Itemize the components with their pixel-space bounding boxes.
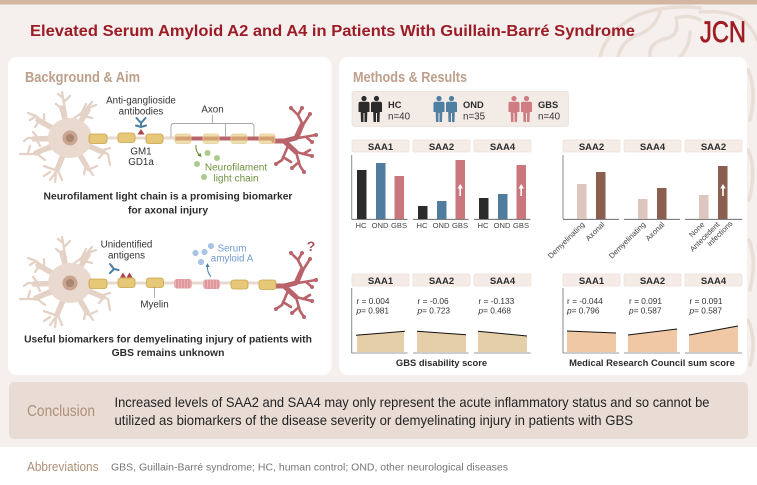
bar chart: subtype and infection: None xyxy=(687,220,706,239)
heading: background and aim: Background & Aim xyxy=(25,69,140,86)
bar chart: subtype and infection: infections xyxy=(705,219,735,248)
diagram: axonal injury neuron xyxy=(20,92,318,182)
label: axon: Axon xyxy=(201,104,224,116)
text: conclusion statement xyxy=(114,394,710,428)
correlation charts: GBS disability score: p= 0.981 xyxy=(356,306,389,316)
correlation charts: GBS disability score: SAA1 xyxy=(368,276,394,287)
bar chart: SAA by group: SAA1 xyxy=(368,142,394,153)
bar chart: SAA by group: OND xyxy=(372,221,389,230)
label: unidentified antigens: antigens xyxy=(108,250,145,262)
label: unidentified antigens: Unidentified xyxy=(101,240,152,250)
legend item: GBS: GBS xyxy=(538,100,558,110)
text: conclusion statement: utilized as biomarkers of the disease severity or demyelinating injury in patients with GBS xyxy=(114,412,633,428)
label: myelin xyxy=(140,287,169,310)
legend item: HC: HC xyxy=(388,100,402,110)
correlation charts: Medical Research Council sum score: r = 0.091 xyxy=(629,296,662,306)
bar chart: SAA by group: OND xyxy=(433,221,450,230)
bar chart: subtype and infection: Demyelinating xyxy=(607,220,647,260)
heading: methods and results: Methods & Results xyxy=(353,69,467,86)
text: unknown biomarkers statement: GBS remains unknown xyxy=(112,348,224,359)
correlation charts: Medical Research Council sum score: SAA1 xyxy=(579,276,605,287)
correlation charts: Medical Research Council sum score: p= 0.796 xyxy=(566,306,600,316)
bar chart: subtype and infection: Axonal xyxy=(584,220,607,243)
panel: conclusion xyxy=(9,382,748,439)
legend: groups xyxy=(352,92,568,126)
correlation charts: GBS disability score: p= 0.468 xyxy=(478,306,511,316)
text: unknown biomarkers statement: Useful biomarkers for demyelinating injury of patients with xyxy=(24,334,312,346)
correlation charts: GBS disability score xyxy=(352,274,531,368)
correlation charts: GBS disability score: r = -0.06 xyxy=(418,296,449,306)
diagram: demyelinating injury neuron xyxy=(20,237,318,327)
bar chart: subtype and infection: SAA4 xyxy=(640,142,666,153)
correlation charts: GBS disability score: p= 0.723 xyxy=(416,306,450,316)
label: myelin: Myelin xyxy=(140,300,169,310)
bar chart: SAA by group: SAA2 xyxy=(429,142,454,153)
correlation charts: GBS disability score: r = -0.133 xyxy=(478,296,515,306)
label: neurofilament light chain: Neurofilament xyxy=(205,162,267,174)
text: NfL statement: for axonal injury xyxy=(128,206,208,216)
bar chart: SAA by group: HC xyxy=(417,221,428,230)
bar chart: subtype and infection: Axonal xyxy=(644,220,667,243)
label: neurofilament light chain: light chain xyxy=(213,174,259,184)
panel: methods and results xyxy=(339,57,747,375)
label: serum amyloid A: Serum xyxy=(218,244,246,254)
icon: antibody xyxy=(136,118,146,127)
bar chart: SAA by group: SAA4 xyxy=(490,142,516,153)
text: NfL statement: Neurofilament light chain is a promising biomarker xyxy=(44,192,292,202)
bar chart: subtype and infection: Demyelinating xyxy=(546,220,586,260)
bar chart: subtype and infection: SAA2 xyxy=(701,142,726,153)
heading: conclusion: Conclusion xyxy=(27,403,95,420)
icon: serum amyloid release xyxy=(193,243,214,277)
correlation charts: Medical Research Council sum score: p= 0.587 xyxy=(688,306,722,316)
label: anti-ganglioside antibodies: Anti-ganglioside xyxy=(106,96,176,106)
correlation charts: Medical Research Council sum score: SAA4 xyxy=(701,276,727,287)
bar chart: SAA by group: GBS xyxy=(452,221,468,230)
abbreviations text: GBS, Guillain-Barré syndrome; HC, human control; OND, other neurological diseases xyxy=(111,462,508,474)
correlation charts: Medical Research Council sum score: SAA2 xyxy=(640,276,665,287)
icon: question mark: ? xyxy=(307,238,315,254)
legend item: OND xyxy=(434,96,486,122)
caption: GBS disability score: GBS disability score xyxy=(396,357,487,368)
correlation charts: GBS disability score: SAA2 xyxy=(429,276,454,287)
bar chart: subtype and infection xyxy=(546,140,742,260)
title: Elevated Serum Amyloid A2 and A4 in Patients With Guillain-Barré Syndrome xyxy=(30,23,635,40)
bar chart: subtype and infection: Antecedent xyxy=(688,219,722,254)
label: GM1 GD1a: GM1 xyxy=(130,146,152,158)
legend item: OND: n=35 xyxy=(463,112,486,122)
correlation charts: Medical Research Council sum score: r = 0.091 xyxy=(690,296,723,306)
legend item: GBS: n=40 xyxy=(538,112,561,122)
icon: neurofilament release xyxy=(194,145,220,180)
icon: antibody xyxy=(110,264,118,273)
legend item: OND: OND xyxy=(463,100,484,110)
correlation charts: GBS disability score: r = 0.004 xyxy=(356,296,390,306)
bar chart: SAA by group: HC xyxy=(478,221,489,230)
panel: background and aim xyxy=(8,57,332,375)
legend item: GBS xyxy=(508,96,561,122)
abbreviations heading: Abbreviations xyxy=(27,460,98,474)
icon: antigen triangle xyxy=(138,129,144,134)
bar chart: SAA by group xyxy=(352,140,531,230)
legend item: HC xyxy=(358,96,411,122)
legend item: HC: n=40 xyxy=(388,112,411,122)
bar chart: SAA by group: GBS xyxy=(391,221,407,230)
bar chart: subtype and infection: SAA2 xyxy=(579,142,604,153)
text: conclusion statement: Increased levels of SAA2 and SAA4 may only represent the acute inflammatory status and so cannot be xyxy=(114,394,710,410)
caption: Medical Research Council sum score: Medical Research Council sum score xyxy=(569,357,735,368)
bar chart: SAA by group: HC xyxy=(356,221,367,230)
bracket: axon xyxy=(171,115,254,137)
bar chart: SAA by group: GBS xyxy=(513,221,529,230)
correlation charts: Medical Research Council sum score: r = -0.044 xyxy=(567,296,603,306)
correlation charts: Medical Research Council sum score xyxy=(563,274,742,368)
correlation charts: Medical Research Council sum score: p= 0.587 xyxy=(628,306,662,316)
brain watermark xyxy=(600,7,757,365)
label: anti-ganglioside antibodies: antibodies xyxy=(119,106,163,118)
journal logo: JCN xyxy=(700,16,746,49)
bar chart: SAA by group: OND xyxy=(494,221,511,230)
label: GM1 GD1a: GD1a xyxy=(128,157,154,168)
top band xyxy=(0,0,757,4)
label: serum amyloid A: amyloid A xyxy=(211,254,254,264)
correlation charts: GBS disability score: SAA4 xyxy=(490,276,516,287)
icon: antigen triangles xyxy=(120,272,132,278)
